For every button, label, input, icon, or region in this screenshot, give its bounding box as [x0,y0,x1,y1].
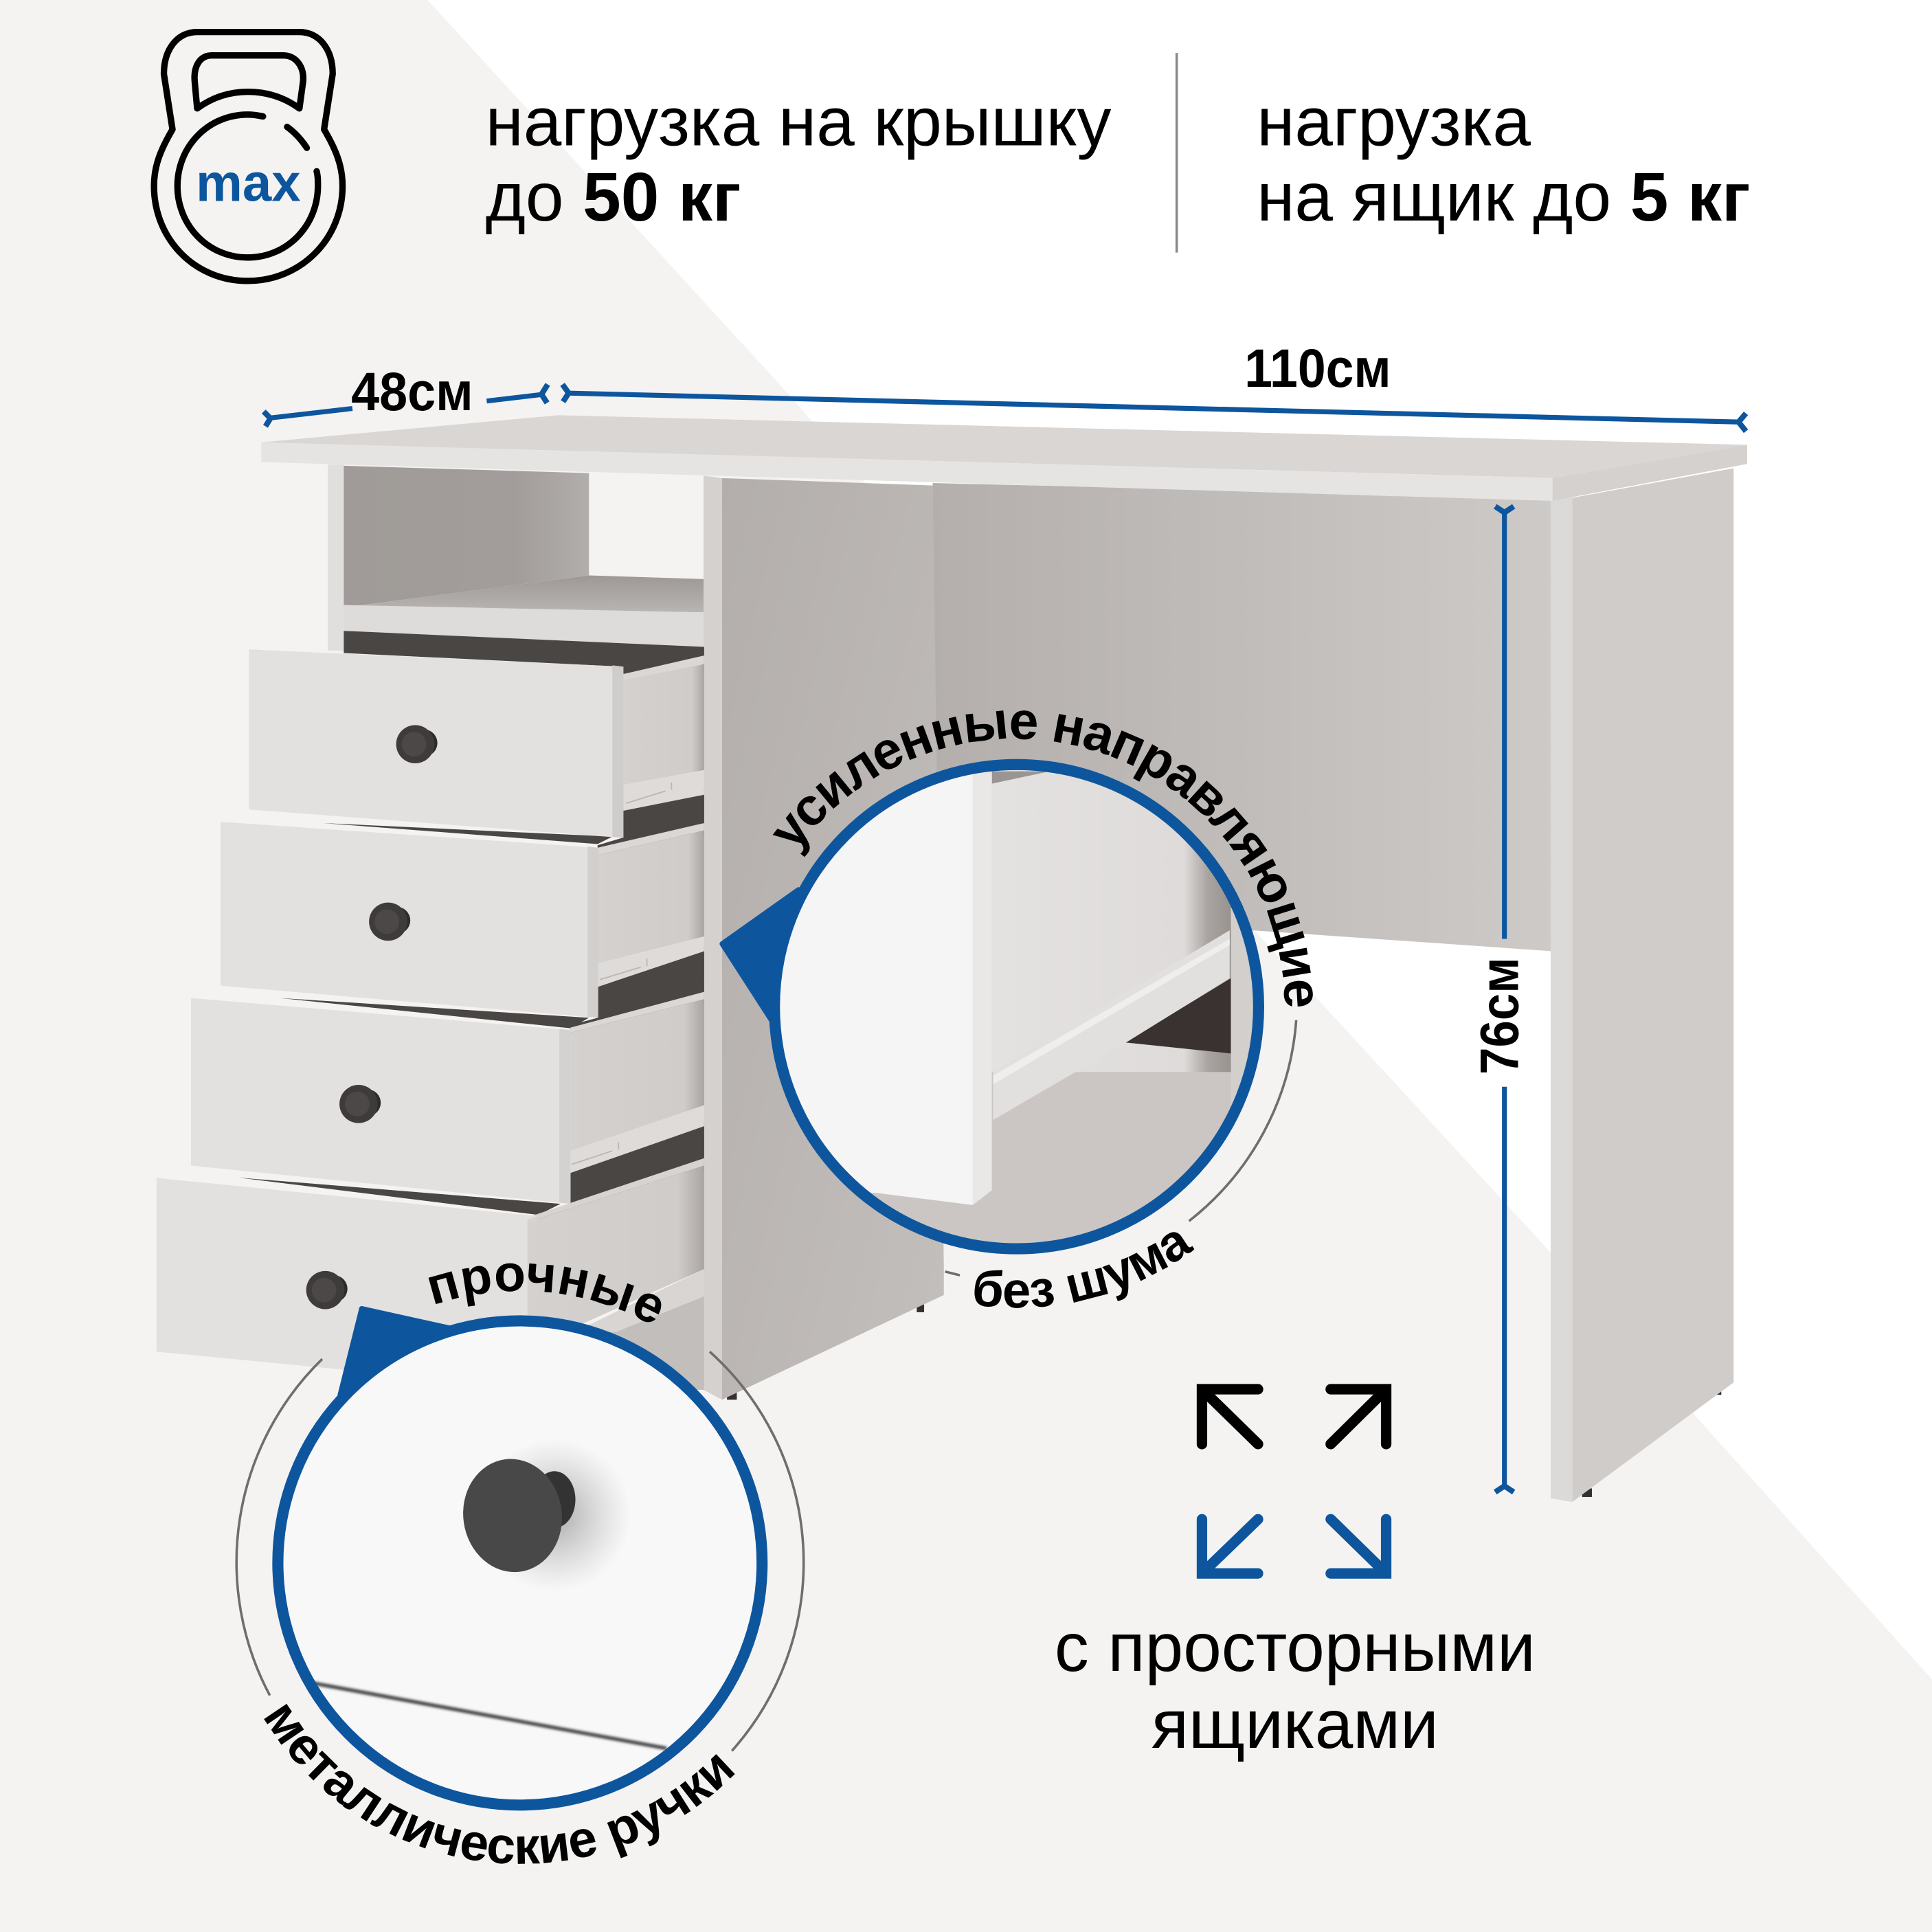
drawer knob 1 [396,725,438,763]
text: drawer load: нагрузка [1257,85,1531,161]
divider [1176,53,1178,253]
arrow top right [1331,1389,1386,1444]
label 110: 110см [1244,338,1391,398]
label 76: 76см [1469,957,1529,1075]
arrow bottom right [1331,1519,1386,1573]
caption: reinforced rails: усиленные направляющие [772,710,1313,1007]
cabinet interior dark areas [238,631,704,1222]
right end panel [1551,468,1733,1502]
dimension: height 76 cm [1469,506,1529,1492]
pointer [722,890,798,1020]
icon text: max: max [196,153,301,212]
drawer 3 [191,992,704,1204]
open shelf niche [344,466,704,647]
callout: knob zoom circle [235,1263,805,1864]
drawer knob 4 [306,1271,348,1309]
dimension: depth 48 cm [264,361,548,427]
desk illustration [157,415,1747,1502]
callout: rails zoom circle [719,710,1313,1308]
label 48: 48см [351,361,473,422]
drawer knob 3 [339,1085,381,1123]
desk top [261,415,1747,501]
text: spacious drawers: с просторными [1055,1610,1536,1686]
dimension: width 110 cm [563,338,1746,431]
caption: metal handles: металлические ручки [264,1704,735,1864]
thin arcs [945,1020,1296,1275]
text: drawer load: на ящик до 5 кг [1257,159,1751,236]
text: tabletop load: до 50 кг [486,159,741,236]
text: tabletop load: нагрузка на крышку [486,85,1111,161]
drawer 1 [249,649,704,838]
center panel [704,475,944,1400]
icon: expand arrows [1202,1389,1386,1573]
rail close-up photo [870,770,1253,1244]
caption: no noise: без шума [974,1232,1194,1308]
drawer knob 2 [369,903,410,941]
drawer 2 [221,822,704,1018]
icon: kettlebell max load [154,32,343,281]
text: spacious drawers: ящиками [1152,1687,1439,1763]
desk feet [727,1301,1721,1497]
thin arcs [236,1351,804,1751]
knob close-up photo [313,1439,666,1749]
pointer [340,1309,451,1395]
arrow top left [1202,1389,1258,1444]
caption: durable: прочные [429,1263,661,1322]
drawer 4 [157,1158,704,1390]
arrow bottom left [1202,1519,1258,1573]
back modesty panel [933,483,1553,951]
drawer rail marks [572,783,671,1165]
cabinet left panel [328,464,344,651]
